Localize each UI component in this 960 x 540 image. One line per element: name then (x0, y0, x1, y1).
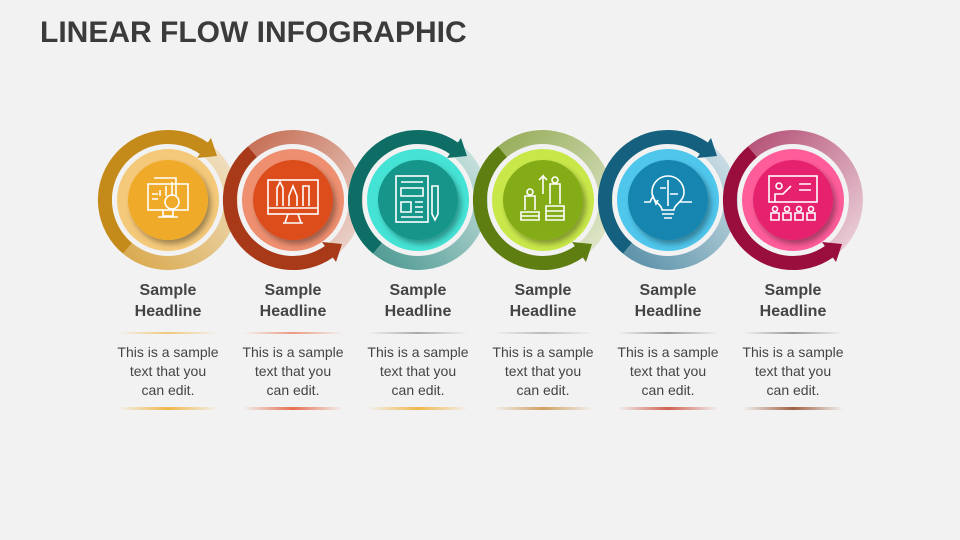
text column 5: Sample (640, 282, 696, 299)
text column 3: can edit. (392, 382, 444, 398)
text column 2: Sample (265, 282, 321, 299)
text column 4: can edit. (517, 382, 569, 398)
text column 5: This is a sample (617, 344, 719, 360)
icon: finance monitor (148, 178, 188, 217)
step 3 circle (355, 137, 481, 263)
text column 4: Headline (510, 303, 576, 320)
text column 1: can edit. (142, 382, 194, 398)
step 2 circle (230, 137, 356, 263)
icon: presentation (769, 176, 817, 220)
text column 4: Sample (515, 282, 571, 299)
text column 6 (742, 282, 844, 410)
icon: growth people (521, 176, 564, 220)
text column 2: can edit. (267, 382, 319, 398)
text column 6: text that you (755, 363, 831, 379)
text column 1: Sample (140, 282, 196, 299)
text column 3: Headline (385, 303, 451, 320)
step 6 circle (730, 137, 856, 263)
text column 5: text that you (630, 363, 706, 379)
text column 6: Headline (760, 303, 826, 320)
text column 6: can edit. (767, 382, 819, 398)
text column 3: Sample (390, 282, 446, 299)
icon: brain bulb (644, 176, 692, 218)
text column 6: Sample (765, 282, 821, 299)
text column 5 (617, 282, 719, 410)
text column 5: can edit. (642, 382, 694, 398)
step 5 circle (605, 137, 731, 263)
text column 1 (117, 282, 219, 410)
text column 2: This is a sample (242, 344, 344, 360)
step 1 circle (105, 137, 231, 263)
step 4 circle (480, 137, 606, 263)
text column 4 (492, 282, 594, 410)
text column 2: Headline (260, 303, 326, 320)
text column 4: text that you (505, 363, 581, 379)
text column 3: text that you (380, 363, 456, 379)
text column 1: This is a sample (117, 344, 219, 360)
text column 2 (242, 282, 344, 410)
text column 4: This is a sample (492, 344, 594, 360)
text column 3: This is a sample (367, 344, 469, 360)
title: LINEAR FLOW INFOGRAPHIC (40, 16, 467, 49)
text column 3 (367, 282, 469, 410)
text column 1: Headline (135, 303, 201, 320)
text column 6: This is a sample (742, 344, 844, 360)
text column 5: Headline (635, 303, 701, 320)
icon: design monitor (268, 180, 318, 223)
icon: document (396, 176, 438, 222)
text column 2: text that you (255, 363, 331, 379)
text column 1: text that you (130, 363, 206, 379)
